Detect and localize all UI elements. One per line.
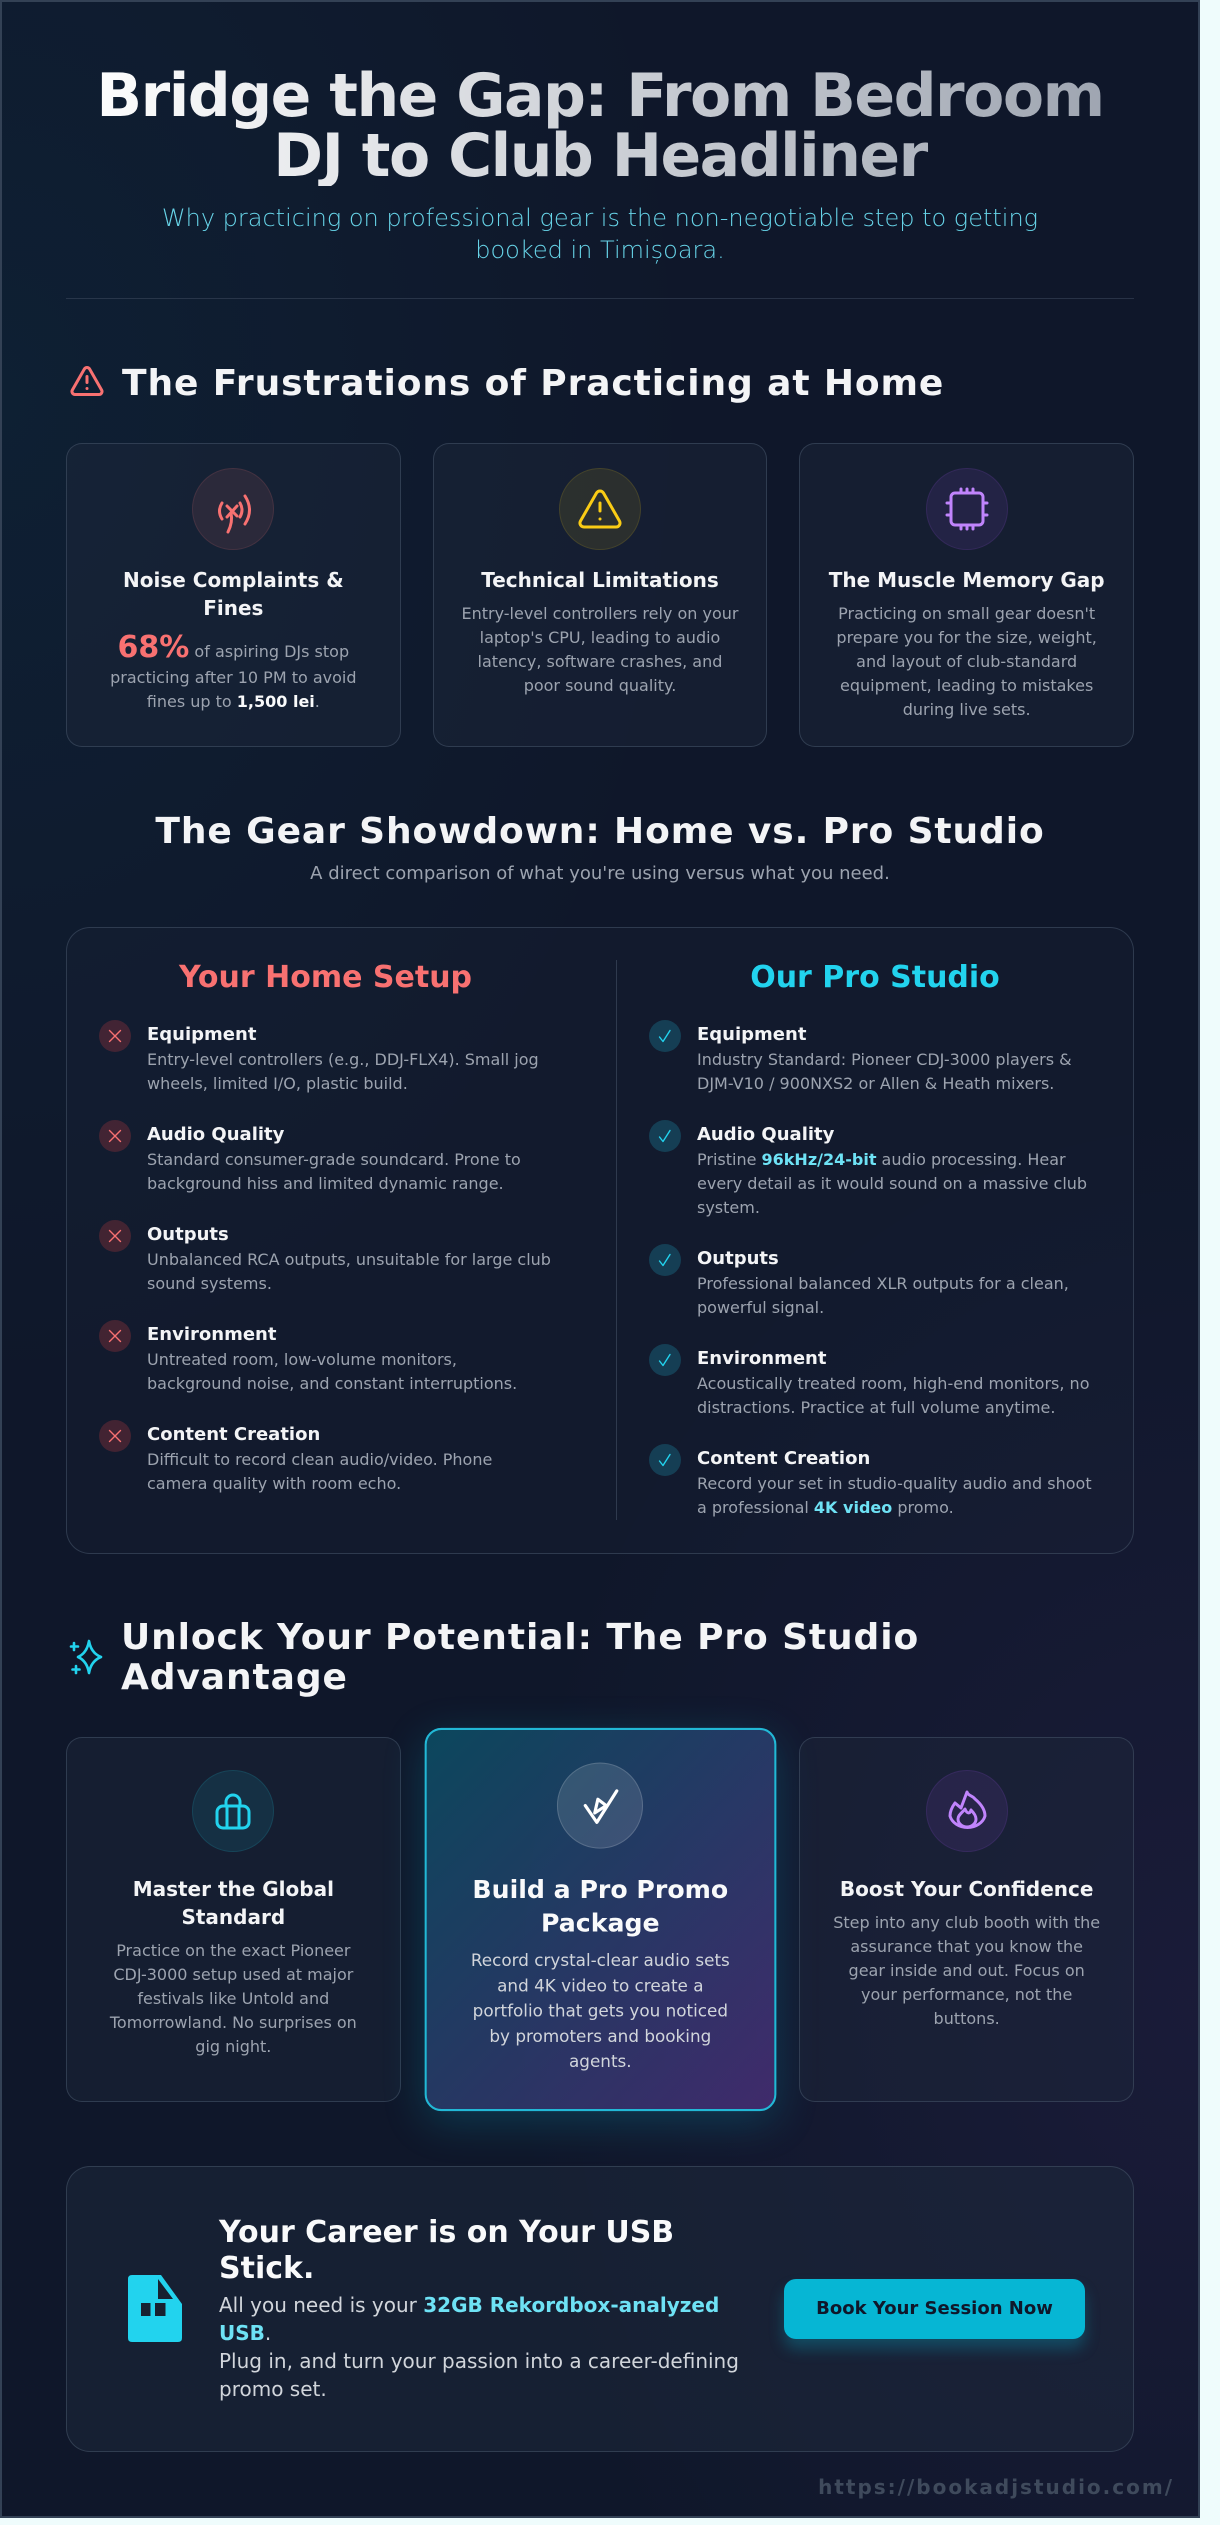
sub text: A direct comparison of what you're using versus what you need.	[310, 863, 890, 884]
card text: buttons.	[934, 2009, 1000, 2028]
pro item: content creation: Record your set in studio-quality audio and shoot	[697, 1474, 1092, 1493]
card text: Practice on the exact Pioneer	[116, 1941, 350, 1960]
pro item: content creation: Content Creation	[697, 1448, 870, 1469]
subtitle: Why practicing on professional gear is the non-negotiable step to getting	[162, 204, 1038, 232]
home item: environment: Environment	[147, 1324, 276, 1345]
column divider	[616, 960, 617, 1520]
card title: Fines	[203, 596, 263, 620]
section heading: gear showdown	[155, 811, 1045, 884]
icon: x	[99, 1120, 131, 1152]
card text	[836, 604, 1097, 719]
heading text: Advantage	[121, 1657, 348, 1698]
home item: outputs: Outputs	[147, 1224, 229, 1245]
icon: usb file	[128, 2275, 182, 2342]
subtitle: booked in Timișoara.	[475, 236, 725, 264]
pro item: outputs	[649, 1244, 1069, 1317]
card text: portfolio that gets you noticed	[472, 2001, 728, 2021]
right heading: Our Pro Studio	[750, 960, 1000, 995]
cta heading	[218, 2215, 674, 2286]
pro item: outputs: Outputs	[697, 1248, 779, 1269]
icon: bag	[192, 1770, 274, 1852]
card text	[461, 604, 738, 695]
card title: Master the Global	[133, 1877, 334, 1901]
icon: check	[649, 1344, 681, 1376]
icon: flame	[926, 1770, 1008, 1852]
panel: muscle memory	[799, 443, 1134, 747]
card text with statistic	[110, 630, 357, 711]
home item: audio quality: background hiss and limited dynamic range.	[147, 1174, 504, 1193]
icon: x	[99, 1020, 131, 1052]
pro item: content creation: a professional 4K video promo.	[697, 1498, 954, 1517]
home item: outputs	[99, 1220, 551, 1293]
subtitle	[162, 204, 1038, 264]
pro item: outputs: powerful signal.	[697, 1298, 824, 1317]
card text with statistic: 68% of aspiring DJs stop	[118, 630, 349, 665]
pro item: audio quality: system.	[697, 1198, 760, 1217]
card text: latency, software crashes, and	[478, 652, 722, 671]
card text: Record crystal-clear audio sets	[471, 1950, 729, 1970]
card text	[110, 1941, 357, 2056]
card text	[833, 1913, 1100, 2028]
pro item: equipment: Equipment	[697, 1024, 806, 1045]
title: DJ to Club Headliner	[273, 121, 927, 191]
cta text: All you need is your 32GB Rekordbox-analyzed	[219, 2293, 719, 2317]
pro item: audio quality: every detail as it would sound on a massive club	[697, 1174, 1087, 1193]
card text: your performance, not the	[861, 1985, 1072, 2004]
cta button: Book Your Session Now	[816, 2298, 1053, 2319]
home item: environment: background noise, and constant interruptions.	[147, 1374, 517, 1393]
card text: equipment, leading to mistakes	[840, 676, 1093, 695]
card text: festivals like Untold and	[137, 1989, 329, 2008]
pro item: environment	[649, 1344, 1089, 1417]
home item: content creation	[99, 1420, 492, 1493]
card title: Build a Pro Promo	[472, 1875, 728, 1904]
pro item: equipment: Industry Standard: Pioneer CDJ-3000 players &	[697, 1050, 1072, 1069]
panel: comparison	[66, 927, 1134, 1554]
icon: check	[649, 1120, 681, 1152]
panel: global standard	[66, 1737, 401, 2102]
card text: assurance that you know the	[850, 1937, 1083, 1956]
pro item: environment: Acoustically treated room, high-end monitors, no	[697, 1374, 1089, 1393]
card text with statistic: fines up to 1,500 lei.	[147, 692, 320, 711]
panel: pro promo package (featured)	[424, 1728, 776, 2111]
icon: check	[649, 1020, 681, 1052]
card text: by promoters and booking	[489, 2026, 711, 2046]
home item: environment: Untreated room, low-volume monitors,	[147, 1350, 457, 1369]
pro item: audio quality: Audio Quality	[697, 1124, 834, 1145]
cta text: promo set.	[219, 2377, 327, 2401]
icon: sparkles	[70, 1640, 102, 1674]
card text: Step into any club booth with the	[833, 1913, 1100, 1932]
icon: alert	[559, 468, 641, 550]
panel: boost confidence	[799, 1737, 1134, 2102]
icon: x	[99, 1220, 131, 1252]
card text: Entry-level controllers rely on your	[461, 604, 738, 623]
panel: noise complaints	[66, 443, 401, 747]
icon: x	[99, 1320, 131, 1352]
icon: check	[649, 1244, 681, 1276]
icon: chip	[926, 468, 1008, 550]
card text: Practicing on small gear doesn't	[838, 604, 1095, 623]
card title: Technical Limitations	[481, 568, 719, 592]
heading text	[121, 1617, 919, 1698]
home item: audio quality	[99, 1120, 521, 1193]
card title: Noise Complaints &	[123, 568, 344, 592]
card title: Standard	[181, 1905, 285, 1929]
icon: broadcast	[192, 468, 274, 550]
card title	[472, 1875, 728, 1938]
home item: equipment: Entry-level controllers (e.g., DDJ-FLX4). Small jog	[147, 1050, 539, 1069]
home item: equipment: wheels, limited I/O, plastic build.	[147, 1074, 408, 1093]
cta text: Plug in, and turn your passion into a career-defining	[219, 2349, 739, 2373]
home item: audio quality: Standard consumer-grade soundcard. Prone to	[147, 1150, 521, 1169]
cta heading: Stick.	[219, 2251, 314, 2286]
card text: prepare you for the size, weight,	[836, 628, 1097, 647]
title: Bridge the Gap: From Bedroom	[96, 61, 1104, 131]
cta text	[219, 2293, 739, 2401]
icon: check mark	[557, 1763, 643, 1849]
card text: Tomorrowland. No surprises on	[110, 2013, 357, 2032]
icon: warning triangle	[70, 366, 104, 396]
card text: CDJ-3000 setup used at major	[113, 1965, 353, 1984]
left heading: Your Home Setup	[179, 960, 472, 995]
icon: check	[649, 1444, 681, 1476]
card text: laptop's CPU, leading to audio	[480, 628, 720, 647]
card text: poor sound quality.	[524, 676, 676, 695]
card text	[471, 1950, 729, 2071]
section heading: frustrations	[70, 363, 944, 404]
home item: content creation: Content Creation	[147, 1424, 320, 1445]
panel: call to action	[66, 2166, 1134, 2452]
home item: outputs: sound systems.	[147, 1274, 272, 1293]
icon: x	[99, 1420, 131, 1452]
card title	[133, 1877, 334, 1929]
card text: gig night.	[195, 2037, 271, 2056]
home item: outputs: Unbalanced RCA outputs, unsuitable for large club	[147, 1250, 551, 1269]
pro item: content creation	[649, 1444, 1092, 1517]
pro item: audio quality	[649, 1120, 1087, 1217]
card text: and layout of club-standard	[856, 652, 1077, 671]
section heading: unlock potential	[70, 1617, 919, 1698]
card title: Boost Your Confidence	[840, 1877, 1093, 1901]
pro item: audio quality: Pristine 96kHz/24-bit audio processing. Hear	[697, 1150, 1066, 1169]
footer url: https://bookadjstudio.com/	[818, 2475, 1174, 2499]
home item: equipment: Equipment	[147, 1024, 256, 1045]
pro item: equipment: DJM-V10 / 900NXS2 or Allen & Heath mixers.	[697, 1074, 1054, 1093]
home item: environment	[99, 1320, 517, 1393]
cta text: USB.	[219, 2321, 271, 2345]
pro item: equipment	[649, 1020, 1072, 1093]
card title	[123, 568, 344, 620]
heading text: Unlock Your Potential: The Pro Studio	[121, 1617, 919, 1658]
card text: during live sets.	[903, 700, 1031, 719]
card title: Package	[541, 1908, 659, 1938]
cta button	[784, 2279, 1085, 2339]
home item: audio quality: Audio Quality	[147, 1124, 284, 1145]
pro item: outputs: Professional balanced XLR outputs for a clean,	[697, 1274, 1069, 1293]
card title: The Muscle Memory Gap	[829, 568, 1105, 592]
panel: technical limitations	[433, 443, 767, 747]
home item: equipment	[99, 1020, 539, 1093]
pro item: environment: Environment	[697, 1348, 826, 1369]
card text: agents.	[569, 2051, 631, 2071]
home item: content creation: camera quality with room echo.	[147, 1474, 401, 1493]
card text: gear inside and out. Focus on	[849, 1961, 1085, 1980]
cta heading: Your Career is on Your USB	[219, 2215, 674, 2250]
home item: content creation: Difficult to record clean audio/video. Phone	[147, 1450, 492, 1469]
card text with statistic: practicing after 10 PM to avoid	[110, 668, 357, 687]
header block	[66, 66, 1134, 299]
pro item: environment: distractions. Practice at full volume anytime.	[697, 1398, 1055, 1417]
heading text: The Frustrations of Practicing at Home	[122, 363, 944, 404]
title	[66, 66, 1134, 186]
card text: and 4K video to create a	[497, 1976, 703, 1996]
heading text: The Gear Showdown: Home vs. Pro Studio	[155, 811, 1045, 852]
